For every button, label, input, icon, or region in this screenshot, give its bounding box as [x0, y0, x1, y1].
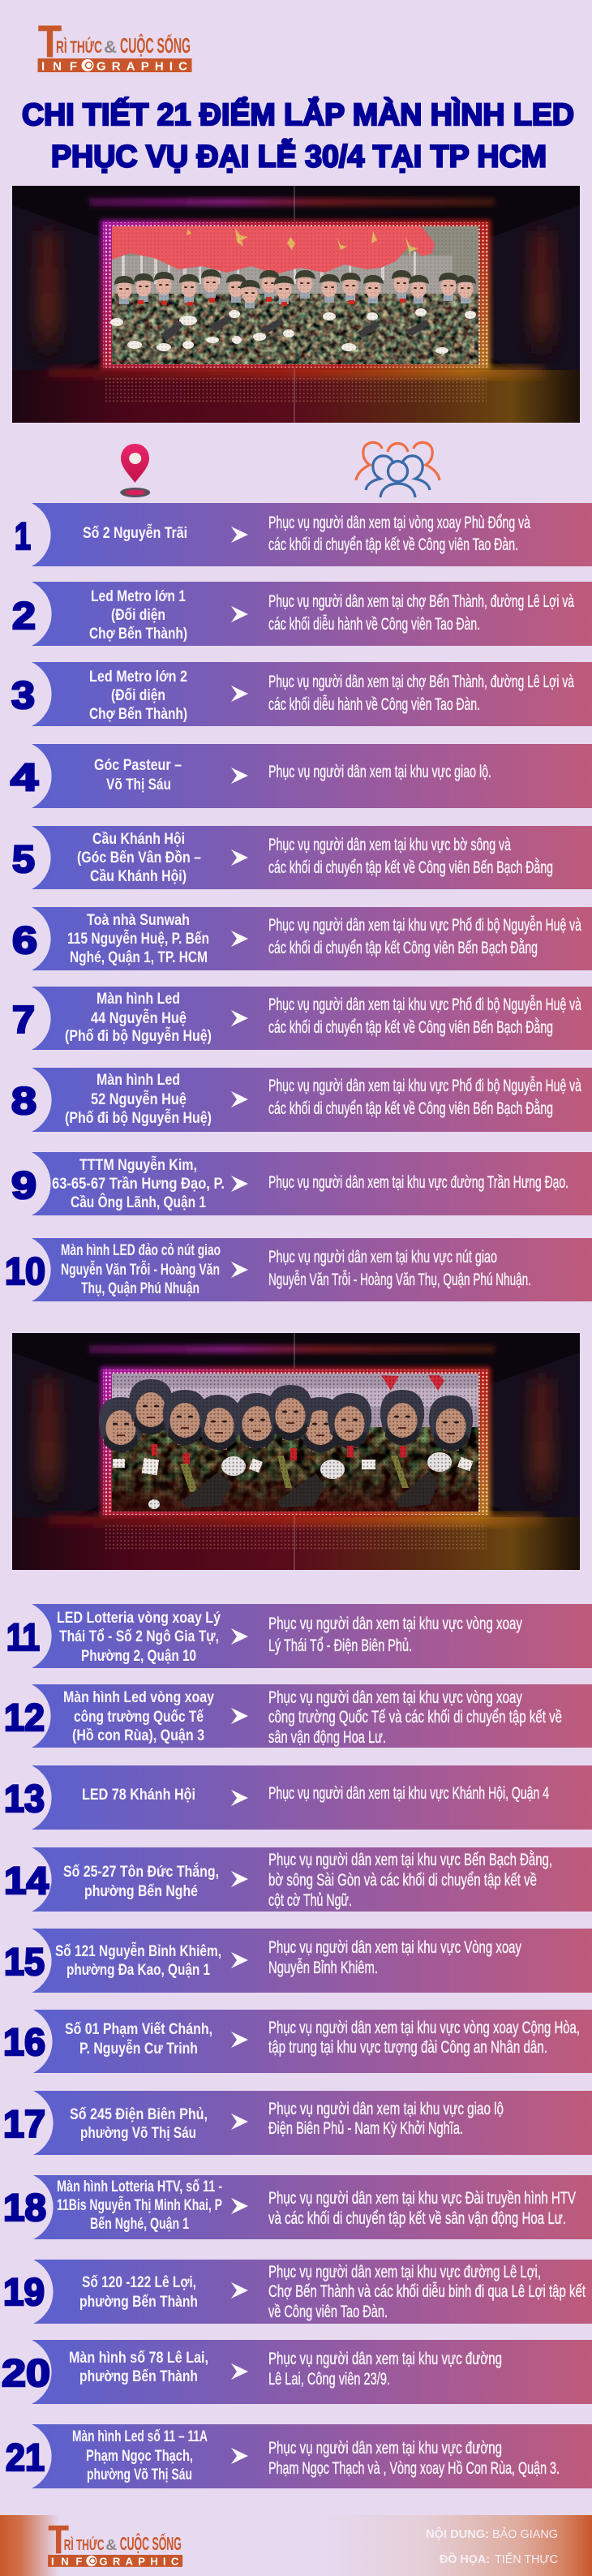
row 17: Số 245 Điện Biên Phủ, [70, 2105, 208, 2123]
row 12: (Hồ con Rùa), Quận 3 [72, 1727, 204, 1744]
row 2: (Đối diện [111, 606, 165, 624]
title: CHI TIẾT 21 ĐIỂM LẮP MÀN HÌNH LED [22, 96, 574, 132]
title: PHỤC VỤ ĐẠI LỄ 30/4 TẠI TP HCM [51, 138, 547, 174]
row 15: 15 [4, 1940, 45, 1983]
row 7 [12, 987, 592, 1050]
row 7: Màn hình Led [97, 990, 180, 1008]
row 15 [4, 1929, 592, 1993]
row 10 [5, 1238, 592, 1301]
row 9: TTTM Nguyễn Kim, [79, 1155, 197, 1174]
row 20: Màn hình số 78 Lê Lai, [69, 2349, 208, 2367]
row 3: Chợ Bến Thành) [89, 705, 187, 723]
footer credits: NỘI DUNG: [426, 2527, 489, 2541]
row 15: phường Đa Kao, Quận 1 [66, 1961, 210, 1979]
row 8: (Phố đi bộ Nguyễn Huệ) [65, 1107, 212, 1127]
footer logo: INF [51, 2556, 82, 2568]
row 4: Góc Pasteur – [94, 756, 182, 774]
row 3: (Đối diện [111, 686, 165, 704]
row 18: Màn hình Lotteria HTV, số 11 - [57, 2178, 222, 2195]
row 11: Phường 2, Quận 10 [81, 1647, 196, 1665]
row 19: Số 120 -122 Lê Lợi, [82, 2273, 196, 2291]
row 10: 10 [5, 1249, 45, 1292]
row 2 [12, 582, 592, 646]
row 17: 17 [3, 2102, 45, 2145]
row 8: 52 Nguyễn Huệ [91, 1089, 187, 1108]
row 6 [12, 907, 592, 970]
row 1: 1 [15, 514, 31, 557]
row 20: phường Bến Thành [79, 2367, 198, 2385]
row 2: Led Metro lớn 1 [91, 587, 186, 605]
row 3: Led Metro lớn 2 [89, 668, 187, 686]
row 9 [11, 1152, 592, 1215]
row 15: Số 121 Nguyễn Bỉnh Khiêm, [55, 1941, 221, 1960]
row 4 [11, 744, 592, 808]
row 5: 5 [12, 837, 35, 880]
row 19: 19 [3, 2270, 45, 2313]
row 17: Điện Biên Phủ - Nam Kỳ Khởi Nghĩa. [268, 2119, 463, 2138]
row 3: 3 [11, 673, 35, 716]
row 6: 115 Nguyễn Huệ, P. Bến [67, 928, 209, 948]
footer logo [48, 2518, 182, 2568]
row 11 [6, 1604, 592, 1668]
row 7: 7 [12, 998, 35, 1041]
row 5: Cầu Khánh Hội) [90, 867, 187, 885]
row 7: 44 Nguyễn Huệ [91, 1008, 187, 1027]
row 20: 20 [2, 2351, 50, 2394]
footer logo: T [48, 2518, 69, 2562]
row 2: Chợ Bến Thành) [89, 625, 187, 643]
row 7: (Phố đi bộ Nguyễn Huệ) [65, 1026, 212, 1045]
row 1 [15, 503, 592, 566]
footer credits: ĐỒ HỌA: [440, 2552, 490, 2566]
row 21: 21 [6, 2436, 45, 2479]
row 2: 2 [12, 594, 36, 637]
row 16: P. Nguyễn Cư Trinh [79, 2038, 198, 2058]
footer band [0, 2515, 592, 2576]
logo: Tri Thuc & Cuoc Song Infographic: & [104, 38, 117, 57]
row 14: Số 25-27 Tôn Đức Thắng, [63, 1861, 219, 1881]
icon: crowd of people [356, 442, 440, 497]
row 16: 16 [3, 2020, 45, 2063]
footer logo: GRAPHIC [99, 2556, 179, 2568]
footer credits: BẢO GIANG [492, 2527, 558, 2541]
row 5: (Góc Bến Vân Đồn – [77, 849, 201, 867]
row 21: Phục vụ người dân xem tại khu vực đường [268, 2439, 502, 2458]
row 16 [3, 2010, 592, 2073]
footer credits [426, 2527, 558, 2566]
footer credits: TIẾN THỰC [495, 2552, 558, 2566]
title [22, 96, 574, 174]
logo: Tri Thuc & Cuoc Song Infographic [37, 15, 191, 73]
row 4: Phục vụ người dân xem tại khu vực giao lộ. [268, 763, 491, 781]
row 10: Nguyễn Văn Trỗi - Hoàng Văn [61, 1259, 220, 1279]
row 4: 4 [11, 755, 38, 798]
row 14: 14 [4, 1859, 49, 1902]
row 12: 12 [4, 1696, 45, 1739]
row 8 [11, 1068, 592, 1132]
logo: Tri Thuc & Cuoc Song Infographic: GRAPHIC [97, 60, 187, 73]
footer logo: CUỘC SỐNG [120, 2533, 182, 2554]
row 3 [11, 662, 592, 726]
row 10: Thụ, Quận Phú Nhuận [81, 1279, 199, 1297]
logo: Tri Thuc & Cuoc Song Infographic: INF [41, 60, 77, 73]
footer logo: & [105, 2536, 117, 2553]
row 17: Phục vụ người dân xem tại khu vực giao lộ [268, 2100, 504, 2118]
row 1: Số 2 Nguyễn Trãi [83, 523, 187, 542]
row 19: phường Bến Thành [79, 2293, 198, 2311]
row 17 [3, 2091, 592, 2155]
row 20: Lê Lai, Công viên 23/9. [268, 2370, 390, 2389]
row 19: về Công viên Tao Đàn. [268, 2303, 388, 2321]
row 13: LED 78 Khánh Hội [82, 1786, 195, 1804]
row 18 [3, 2175, 592, 2239]
photo: LED screen with helmeted soldiers [12, 1333, 580, 1570]
row 12 [4, 1684, 592, 1748]
row 9: 63-65-67 Trần Hưng Đạo, P. [52, 1175, 225, 1193]
photo: LED screen with parading female soldiers [12, 186, 580, 423]
row 10: Màn hình LED đảo cỏ nút giao [61, 1241, 221, 1259]
row 14: phường Bến Nghé [84, 1882, 198, 1900]
row 2: các khối diễu hành về Công viên Tao Đàn. [268, 615, 480, 634]
row 11: Lý Thái Tổ - Điện Biên Phủ. [268, 1636, 412, 1655]
row 18: 18 [3, 2186, 46, 2229]
row 12: công trường Quốc Tế [74, 1708, 204, 1726]
logo: Tri Thuc & Cuoc Song Infographic: T [38, 15, 62, 67]
row 18: 11Bis Nguyễn Thị Minh Khai, P [57, 2195, 222, 2214]
row 14: cột cờ Thủ Ngữ. [268, 1891, 352, 1910]
footer logo: RÌ THỨC [64, 2536, 105, 2553]
row 21: phường Võ Thị Sáu [87, 2466, 192, 2484]
row 20 [2, 2340, 592, 2404]
row 13: 13 [4, 1777, 45, 1820]
row 18: Bến Nghé, Quận 1 [90, 2215, 189, 2233]
row 12: Màn hình Led vòng xoay [63, 1688, 214, 1706]
icon: location pin [120, 444, 150, 497]
row 15: Nguyễn Bỉnh Khiêm. [268, 1959, 378, 1977]
row 11: Thái Tổ - Số 2 Ngô Gia Tự, [59, 1628, 219, 1645]
row 19 [3, 2260, 592, 2324]
row 11: 11 [6, 1615, 40, 1658]
row 5 [12, 826, 592, 889]
row 20: Phục vụ người dân xem tại khu vực đường [268, 2350, 502, 2368]
row 13 [4, 1765, 592, 1830]
row 6: Nghé, Quận 1, TP. HCM [70, 948, 208, 966]
row 4: Võ Thị Sáu [106, 776, 171, 793]
row 16: Số 01 Phạm Viết Chánh, [65, 2020, 212, 2038]
row 11: LED Lotteria vòng xoay Lý [57, 1609, 221, 1627]
logo: Tri Thuc & Cuoc Song Infographic: RÌ THỨC [56, 37, 102, 57]
row 3: các khối diễu hành về Công viên Tao Đàn. [268, 695, 480, 714]
row 21 [6, 2424, 592, 2488]
row 9: 9 [11, 1163, 36, 1206]
row 6: Toà nhà Sunwah [87, 911, 190, 929]
row 14 [4, 1847, 592, 1912]
row 8: 8 [11, 1079, 36, 1122]
row 21: Màn hình Led số 11 – 11A [72, 2428, 208, 2445]
row 8: Màn hình Led [97, 1071, 180, 1089]
row 17: phường Võ Thị Sáu [80, 2124, 196, 2142]
logo: Tri Thuc & Cuoc Song Infographic: CUỘC SỐNG [120, 33, 191, 58]
row 12: sân vận động Hoa Lư. [268, 1728, 386, 1747]
row 21: Phạm Ngọc Thạch, [86, 2447, 193, 2465]
row 6: 6 [12, 918, 37, 961]
row 9: Cầu Ông Lãnh, Quận 1 [71, 1192, 206, 1211]
row 5: Cầu Khánh Hội [92, 830, 185, 848]
